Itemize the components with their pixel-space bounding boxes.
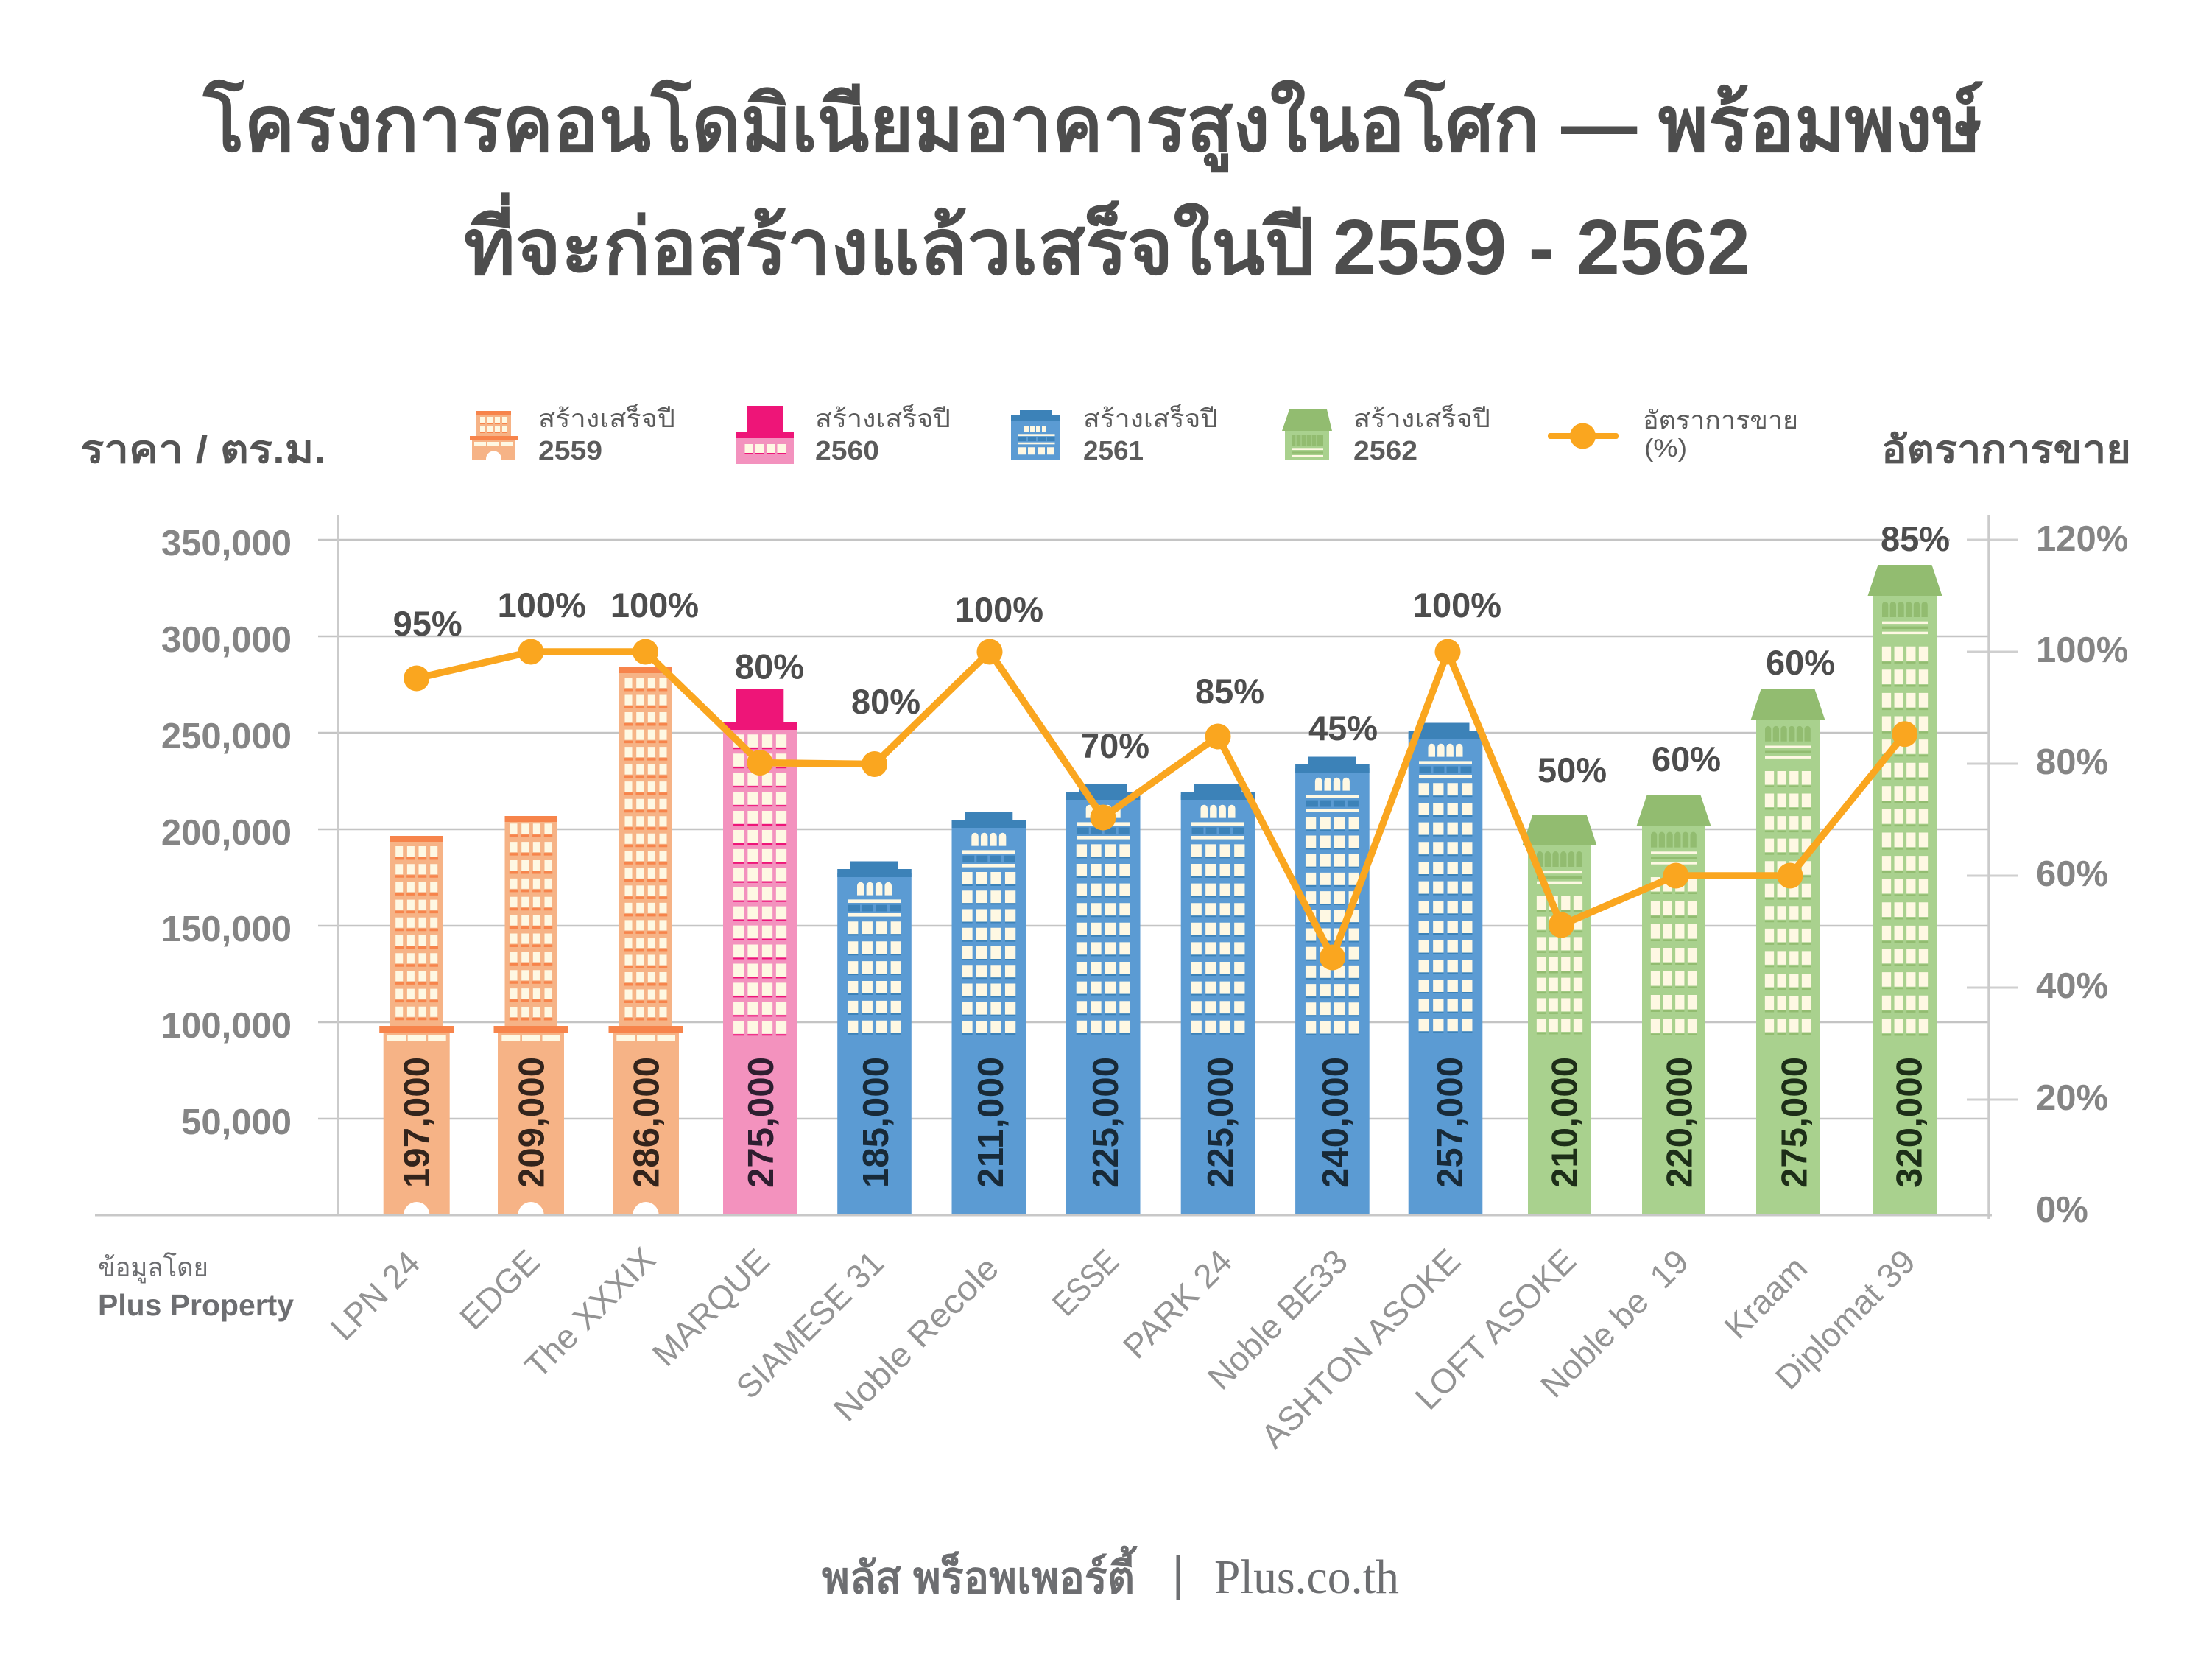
left axis labels: 200,000 — [161, 813, 292, 853]
legend icon: 2559 orange building — [470, 411, 518, 460]
title: ที่จะก่อสร้างแล้วเสร็จในปี — [464, 192, 1314, 291]
legend label: 2562: 2562 — [1353, 435, 1417, 465]
building: Diplomat 39 — [1867, 565, 1942, 1215]
legend label: 2560 — [815, 404, 951, 465]
right axis labels: 60% — [2036, 854, 2108, 894]
building: Noble Recole — [951, 812, 1026, 1215]
sales rate labels: 100% — [498, 585, 586, 625]
sales rate labels: 50% — [1538, 750, 1607, 789]
legend label: 2559: สร้างเสร็จปี — [538, 404, 675, 433]
sales rate labels: 100% — [610, 585, 699, 625]
bar value labels: 225,000 — [1086, 1057, 1126, 1188]
bar value labels: 220,000 — [1660, 1057, 1699, 1188]
chart grid and axes — [318, 515, 2018, 1219]
building: ESSE — [1066, 784, 1140, 1215]
legend label: sales rate: อัตราการขาย — [1643, 407, 1798, 435]
bar value labels — [398, 1057, 1929, 1188]
footer brand: Plus.co.th — [1214, 1550, 1399, 1604]
legend label: 2561 — [1083, 404, 1218, 465]
baseline — [95, 1214, 1992, 1217]
sales rate labels: 70% — [1080, 726, 1149, 765]
project name labels: LOFT ASOKE — [1407, 1241, 1583, 1417]
right axis labels: 0% — [2036, 1190, 2088, 1230]
sales rate labels: 60% — [1766, 643, 1835, 682]
legend label: 2561: สร้างเสร็จปี — [1083, 404, 1218, 433]
bar value labels: 209,000 — [513, 1057, 552, 1188]
legend label: 2560: 2560 — [815, 435, 879, 465]
sales rate labels: 85% — [1195, 672, 1264, 711]
title: 2559 - 2562 — [1333, 204, 1750, 291]
left axis labels — [161, 524, 292, 1142]
right axis labels: 20% — [2036, 1078, 2108, 1118]
sales rate labels: 100% — [1413, 585, 1501, 625]
legend label: 2562: สร้างเสร็จปี — [1353, 404, 1490, 433]
bar value labels: 320,000 — [1889, 1057, 1929, 1188]
right axis labels: 100% — [2036, 630, 2128, 670]
project name labels: Noble Recole — [825, 1248, 1006, 1429]
building: MARQUE — [723, 689, 797, 1215]
sales rate labels: 80% — [851, 682, 920, 721]
left axis labels: 350,000 — [161, 524, 292, 563]
building: EDGE — [493, 816, 568, 1215]
building: LPN 24 — [379, 836, 454, 1215]
bar value labels: 240,000 — [1316, 1057, 1356, 1188]
left axis labels: 150,000 — [161, 910, 292, 949]
project name labels: Diplomat 39 — [1768, 1242, 1923, 1397]
data source note — [98, 1252, 294, 1322]
project name labels: SIAMESE 31 — [728, 1243, 891, 1406]
legend label: sales rate — [1643, 407, 1798, 463]
bar value labels: 210,000 — [1545, 1057, 1585, 1188]
bar value labels: 275,000 — [1775, 1057, 1814, 1188]
left axis labels: 300,000 — [161, 620, 292, 660]
project name labels: Kraam — [1716, 1248, 1814, 1346]
bar value labels: 225,000 — [1201, 1057, 1241, 1188]
project name labels: PARK 24 — [1116, 1242, 1239, 1365]
left axis labels: 50,000 — [181, 1102, 292, 1142]
legend label: 2560: สร้างเสร็จปี — [815, 404, 951, 433]
legend — [470, 404, 1798, 465]
building: PARK 24 — [1181, 784, 1255, 1215]
footer brand: พลัส พร็อพเพอร์ตี้ — [822, 1545, 1138, 1603]
data source note: Plus Property — [98, 1288, 294, 1322]
sales rate labels: 60% — [1652, 739, 1721, 778]
sales rate labels: 100% — [955, 590, 1043, 629]
bar value labels: 211,000 — [971, 1057, 1011, 1188]
sales rate line chart — [404, 639, 1917, 971]
building: The XXXIX — [608, 667, 683, 1215]
legend icon: 2560 pink building — [736, 406, 794, 464]
right axis labels: 40% — [2036, 966, 2108, 1006]
project name labels — [323, 1239, 1923, 1455]
legend label: 2559: 2559 — [538, 435, 602, 465]
title — [202, 79, 1983, 291]
left axis title: ราคา / ตร.ม. — [80, 429, 326, 471]
building: SIAMESE 31 — [837, 862, 912, 1215]
project name labels: The XXXIX — [517, 1239, 663, 1385]
legend label: 2562 — [1353, 404, 1490, 465]
project name labels: EDGE — [452, 1242, 547, 1337]
sales rate labels: 80% — [735, 647, 804, 686]
project name labels: MARQUE — [645, 1241, 777, 1374]
building: Noble be 19 — [1636, 795, 1711, 1215]
sales rate labels: 95% — [393, 604, 462, 643]
project name labels: LPN 24 — [323, 1243, 427, 1348]
right axis labels — [2036, 519, 2128, 1230]
right axis labels: 80% — [2036, 742, 2108, 782]
left axis labels: 250,000 — [161, 717, 292, 756]
bar value labels: 257,000 — [1431, 1057, 1470, 1188]
building: LOFT ASOKE — [1523, 815, 1596, 1215]
data source note: ข้อมูลโดย — [98, 1252, 208, 1284]
project name labels: ASHTON ASOKE — [1253, 1241, 1468, 1455]
right axis labels: 120% — [2036, 519, 2128, 559]
bar value labels: 275,000 — [742, 1057, 781, 1188]
bar value labels: 286,000 — [627, 1057, 667, 1188]
project name labels: Noble be 19 — [1533, 1242, 1696, 1405]
legend label: sales rate: (%) — [1644, 435, 1687, 463]
legend label: 2559 — [538, 404, 675, 465]
bar value labels: 185,000 — [856, 1057, 896, 1188]
sales rate labels — [393, 519, 1950, 789]
building: Noble BE33 — [1295, 757, 1370, 1215]
bar value labels: 197,000 — [398, 1057, 437, 1188]
left axis labels: 100,000 — [161, 1006, 292, 1046]
building: ASHTON ASOKE — [1409, 723, 1482, 1215]
right axis title: อัตราการขาย — [1881, 429, 2131, 471]
legend label: 2561: 2561 — [1083, 435, 1144, 465]
legend icon: sales rate line — [1548, 423, 1619, 449]
footer brand — [822, 1545, 1399, 1604]
sales rate labels: 85% — [1881, 519, 1950, 558]
project name labels: ESSE — [1045, 1242, 1126, 1323]
project name labels: Noble BE33 — [1200, 1242, 1355, 1397]
title: โครงการคอนโดมิเนียมอาคารสูงในอโศก — พร้อมพงษ์ — [202, 79, 1983, 173]
legend icon: 2562 green building — [1282, 409, 1332, 460]
legend icon: 2561 blue building — [1011, 410, 1060, 460]
building: Kraam — [1751, 689, 1825, 1215]
sales rate labels: 45% — [1308, 708, 1378, 748]
